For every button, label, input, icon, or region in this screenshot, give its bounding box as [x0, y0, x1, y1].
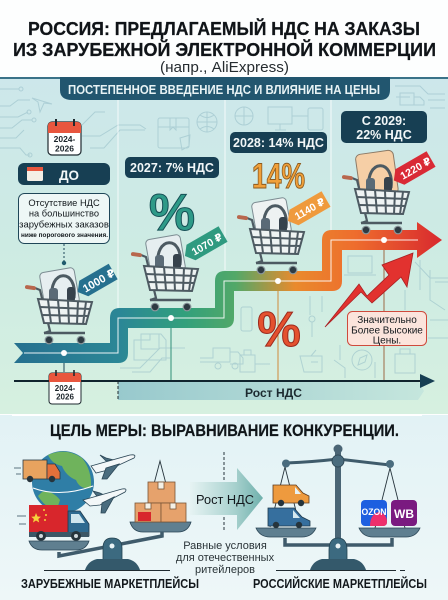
badge: 2029 22 percent — [341, 111, 427, 143]
logo: Ozon — [361, 500, 387, 526]
text: equal conditions for domestic retailers: для отечественных — [176, 552, 275, 564]
logo: Wildberries: WB — [394, 507, 414, 521]
icon: calendar on axis: 2026 — [56, 392, 74, 402]
icon: globe — [32, 451, 94, 513]
icon: calendar 2024-2026: 2026 — [55, 144, 74, 154]
badge: 2027 7 percent: 2027: 7% НДС — [130, 161, 214, 175]
icon: airplane upper — [91, 455, 135, 479]
cart 1000 rubles: 1000 ₽ — [81, 267, 118, 295]
badge: before — [18, 163, 110, 185]
text: equal conditions for domestic retailers — [176, 540, 275, 576]
percent label 14 orange: 14% — [252, 157, 305, 196]
callout: significantly higher prices — [348, 312, 426, 346]
callout: no VAT below threshold: на большинство — [29, 208, 99, 218]
axis band: VAT growth: Рост НДС — [245, 386, 302, 400]
percent sign red: % — [257, 303, 301, 357]
cart 1220 rubles — [342, 150, 436, 234]
section heading banner — [60, 77, 390, 100]
badge: before: ДО — [59, 168, 79, 183]
percent sign green: % — [149, 184, 195, 242]
badge: 2029 22 percent: 22% НДС — [356, 128, 412, 142]
column dividers — [118, 100, 331, 310]
callout: significantly higher prices: Значительно — [357, 315, 417, 326]
callout: no VAT below threshold: зарубежных заказов — [19, 220, 109, 230]
arrow: VAT growth — [190, 452, 263, 530]
panel: purpose of the measure — [0, 414, 448, 600]
callout: no VAT below threshold: Отсутствие НДС — [28, 198, 100, 208]
title: ИЗ ЗАРУБЕЖНОЙ ЭЛЕКТРОННОЙ КОММЕРЦИИ — [13, 39, 436, 60]
badge: 2028 14 percent — [230, 132, 327, 153]
logo: Ozon: OZON — [362, 507, 386, 517]
section heading: ЦЕЛЬ МЕРЫ: ВЫРАВНИВАНИЕ КОНКУРЕНЦИИ. — [50, 422, 399, 440]
section heading banner: ПОСТЕПЕННОЕ ВВЕДЕНИЕ НДС И ВЛИЯНИЕ НА ЦЕНЫ — [68, 82, 380, 97]
label: foreign marketplaces: ЗАРУБЕЖНЫЕ МАРКЕТПЛЕЙСЫ — [21, 576, 199, 591]
icon: orange truck — [14, 460, 60, 482]
callout: no VAT below threshold — [18, 194, 110, 265]
label: Russian marketplaces: РОССИЙСКИЕ МАРКЕТПЛЕЙСЫ — [253, 576, 427, 591]
icon: parcels on scale — [135, 482, 186, 522]
cart 1220 rubles: 1220 ₽ — [398, 155, 434, 182]
callout: significantly higher prices: Цены. — [373, 336, 401, 346]
background circuit and icon pattern — [0, 86, 448, 378]
cart 1000 rubles — [25, 263, 118, 344]
icon: truck with China flag — [17, 505, 89, 541]
rising VAT staircase ribbon — [14, 222, 442, 380]
callout: significantly higher prices: Более Высокие — [351, 326, 423, 336]
logo: Wildberries — [391, 500, 417, 526]
icon: calendar 2024-2026 — [48, 119, 81, 155]
callout: no VAT below threshold: ниже порогового значения. — [21, 232, 108, 239]
text: equal conditions for domestic retailers: ритейлеров — [195, 564, 255, 576]
right scale balanced — [256, 444, 420, 570]
icon: calendar on axis: 2024- — [55, 384, 76, 393]
badge: 2027 7 percent — [125, 157, 219, 178]
badge: 2028 14 percent: 2028: 14% НДС — [233, 136, 324, 150]
icon: blue van — [268, 508, 310, 528]
badge: 2029 22 percent: С 2029: — [362, 114, 406, 128]
title: РОССИЯ: ПРЕДЛАГАЕМЫЙ НДС НА ЗАКАЗЫ — [28, 18, 420, 39]
subtitle: (напр., AliExpress) — [160, 59, 289, 76]
icon: calendar on axis — [49, 370, 81, 404]
icon: orange van — [273, 485, 309, 506]
icon: airplane lower — [83, 489, 126, 513]
left scale tilted — [29, 461, 191, 570]
panel: phased VAT timeline — [0, 77, 448, 414]
cart 1140 rubles: 1140 ₽ — [293, 196, 327, 223]
title — [13, 18, 436, 60]
icon: calendar 2024-2026: 2024- — [54, 134, 76, 144]
cart 1070 rubles: 1070 ₽ — [190, 231, 225, 258]
arrow: VAT growth: Рост НДС — [196, 493, 254, 507]
cart 1070 rubles — [131, 226, 228, 311]
cart 1140 rubles — [237, 191, 331, 274]
arrow: prices rising — [325, 253, 413, 327]
text: equal conditions for domestic retailers: Равные условия — [183, 540, 267, 552]
axis band: VAT growth — [14, 374, 435, 400]
